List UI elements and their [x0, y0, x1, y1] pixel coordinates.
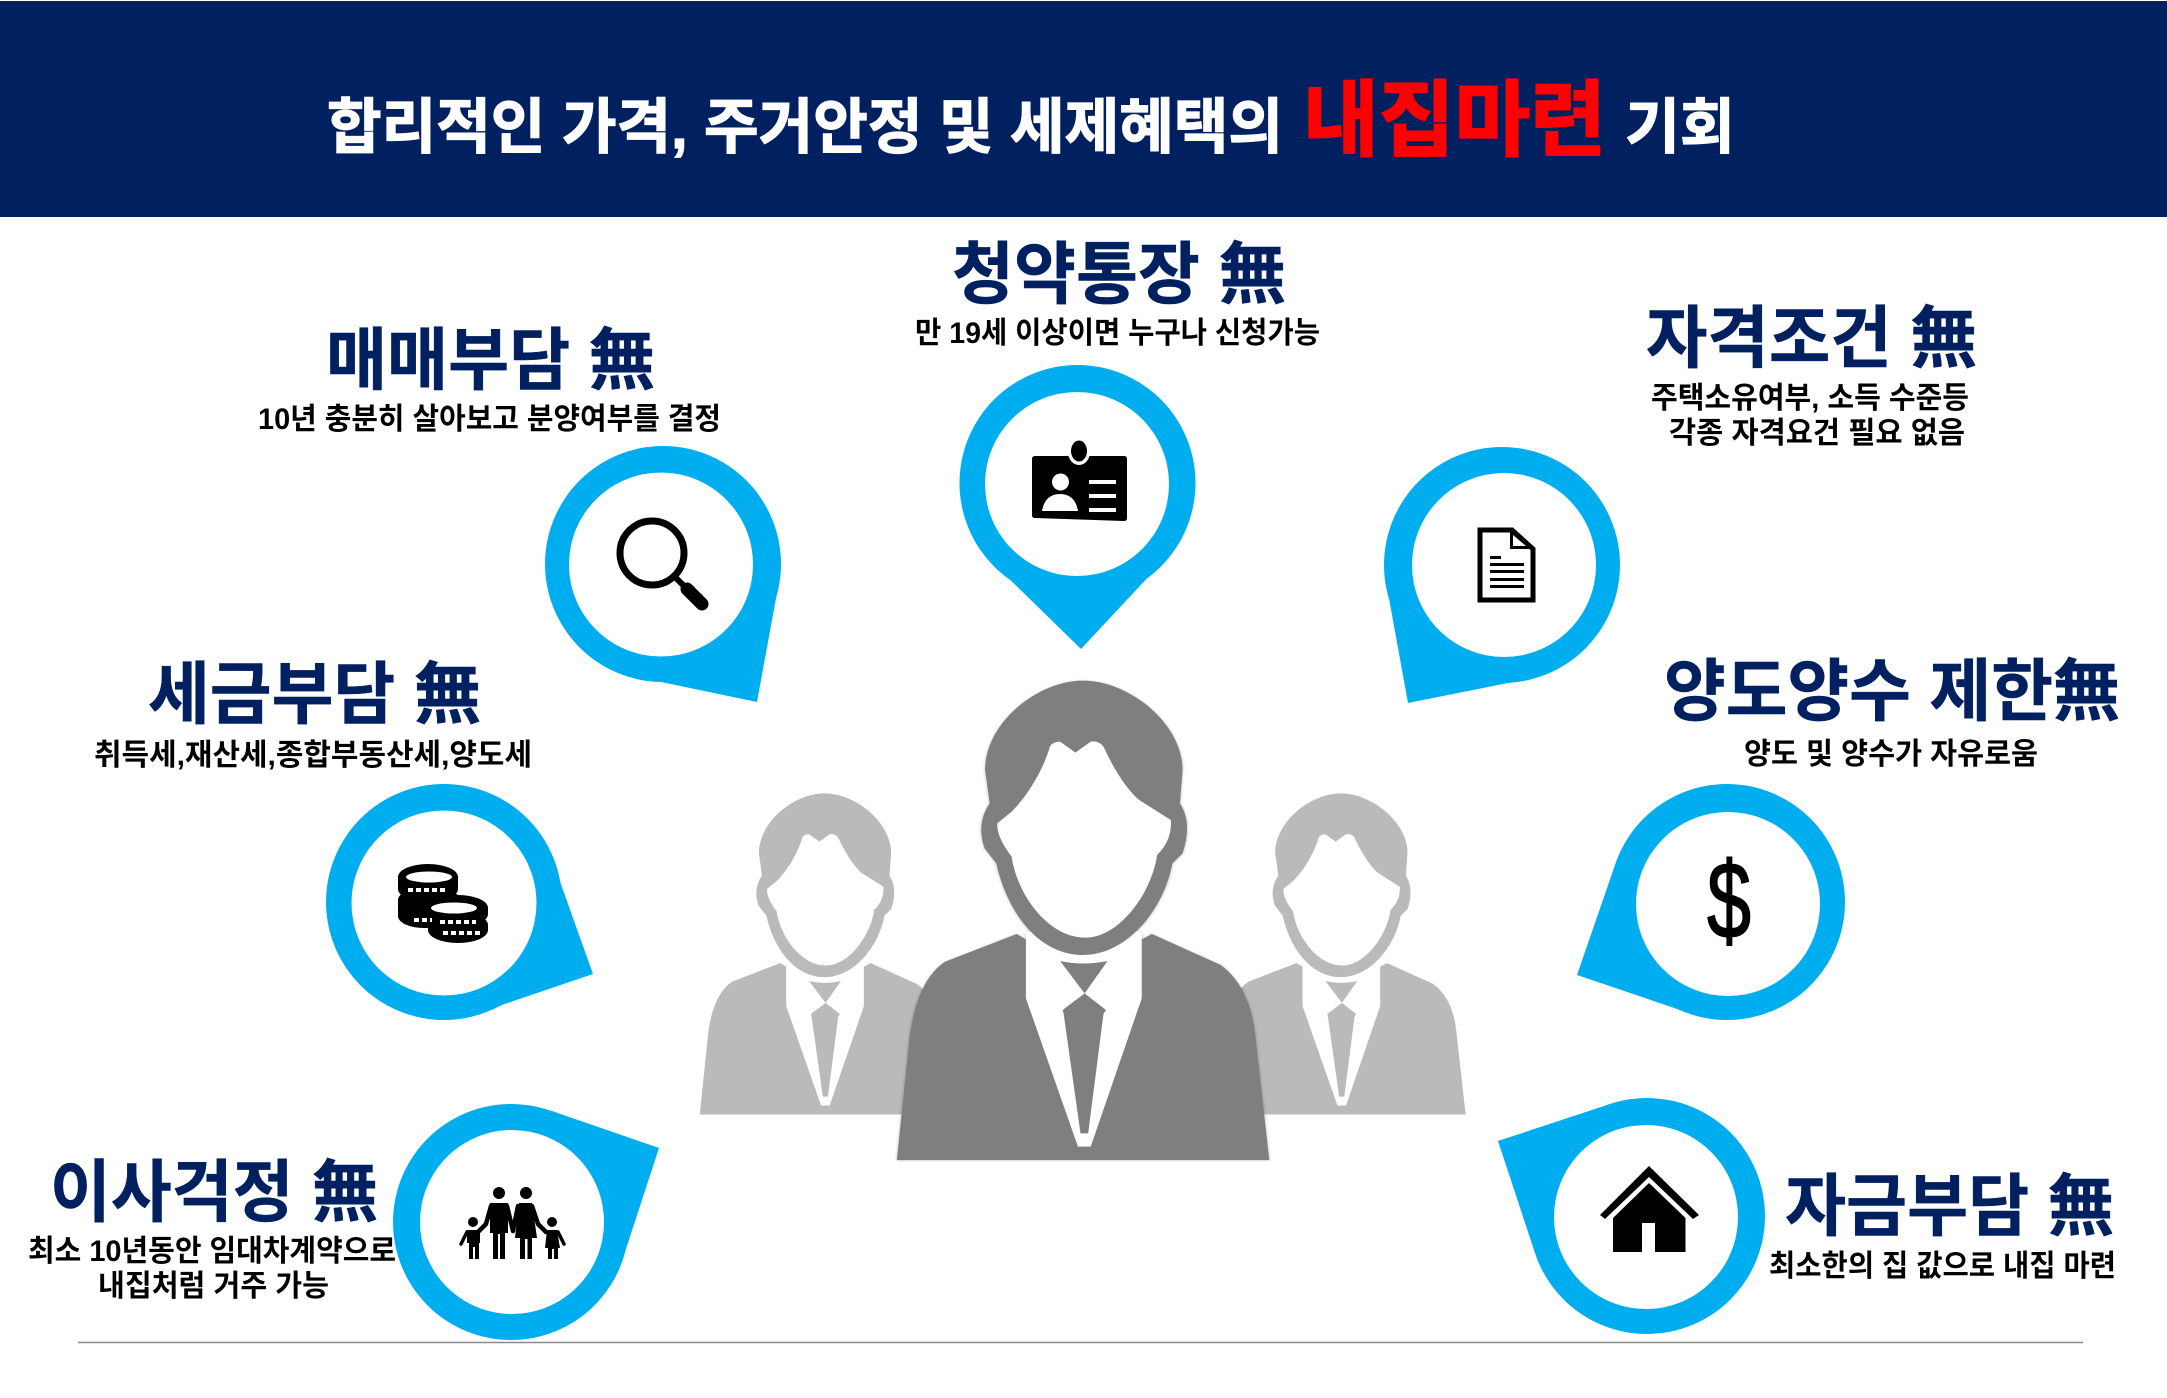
description	[1651, 382, 1969, 450]
header banner	[0, 1, 2167, 217]
icon: house	[1600, 1166, 1699, 1252]
description: 양도 및 양수가 자유로움	[1744, 738, 2038, 771]
description: 만 19세 이상이면 누구나 신청가능	[915, 317, 1320, 350]
icon: coins	[398, 864, 488, 943]
description: 최소한의 집 값으로 내집 마련	[1769, 1250, 2116, 1283]
icon: family	[461, 1187, 564, 1259]
panel: 자격조건	[1384, 301, 1977, 703]
heading: 자격조건 無	[1646, 301, 1977, 377]
panel: 매매부담	[258, 323, 781, 702]
heading: 매매부담 無	[326, 323, 655, 399]
title	[327, 74, 1735, 167]
icon: dollar sign: $	[1707, 840, 1751, 962]
heading: 청약통장 無	[952, 237, 1286, 313]
title: 기회	[1625, 94, 1735, 161]
description	[28, 1235, 396, 1303]
icon: ID badge	[1032, 439, 1127, 521]
description: 최소 10년동안 임대차계약으로	[28, 1235, 396, 1268]
person: center	[897, 681, 1269, 1160]
description: 각종 자격요건 필요 없음	[1669, 417, 1965, 450]
illustration: three business people	[700, 681, 1466, 1160]
panel: 자금부담	[1498, 1098, 2116, 1334]
title: 합리적인 가격, 주거안정 및 세제혜택의	[327, 94, 1283, 161]
heading: 자금부담 無	[1785, 1169, 2114, 1245]
pin marker	[545, 446, 781, 702]
icon: magnifier	[620, 521, 702, 604]
person: left	[700, 793, 949, 1114]
pin marker	[960, 365, 1196, 649]
description: 취득세,재산세,종합부동산세,양도세	[94, 739, 532, 772]
pin marker	[1384, 447, 1620, 703]
title: 내집마련	[1303, 74, 1606, 167]
heading: 세금부담 無	[148, 657, 481, 733]
panel: 청약통장	[915, 237, 1320, 649]
description: 10년 충분히 살아보고 분양여부를 결정	[258, 403, 721, 436]
heading: 이사걱정 無	[50, 1155, 378, 1231]
pin marker	[1498, 1098, 1765, 1334]
heading: 양도양수 제한無	[1664, 654, 2120, 730]
pin marker	[393, 1104, 659, 1340]
panel: 양도양수 제한	[1577, 654, 2120, 1020]
pin marker	[326, 784, 593, 1020]
panel: 이사걱정	[28, 1104, 659, 1340]
person: right	[1216, 793, 1466, 1114]
icon: document	[1480, 530, 1533, 600]
panel: 세금부담	[94, 657, 593, 1020]
pin marker	[1577, 784, 1845, 1020]
description: 주택소유여부, 소득 수준등	[1651, 382, 1969, 415]
description: 내집처럼 거주 가능	[98, 1270, 329, 1303]
